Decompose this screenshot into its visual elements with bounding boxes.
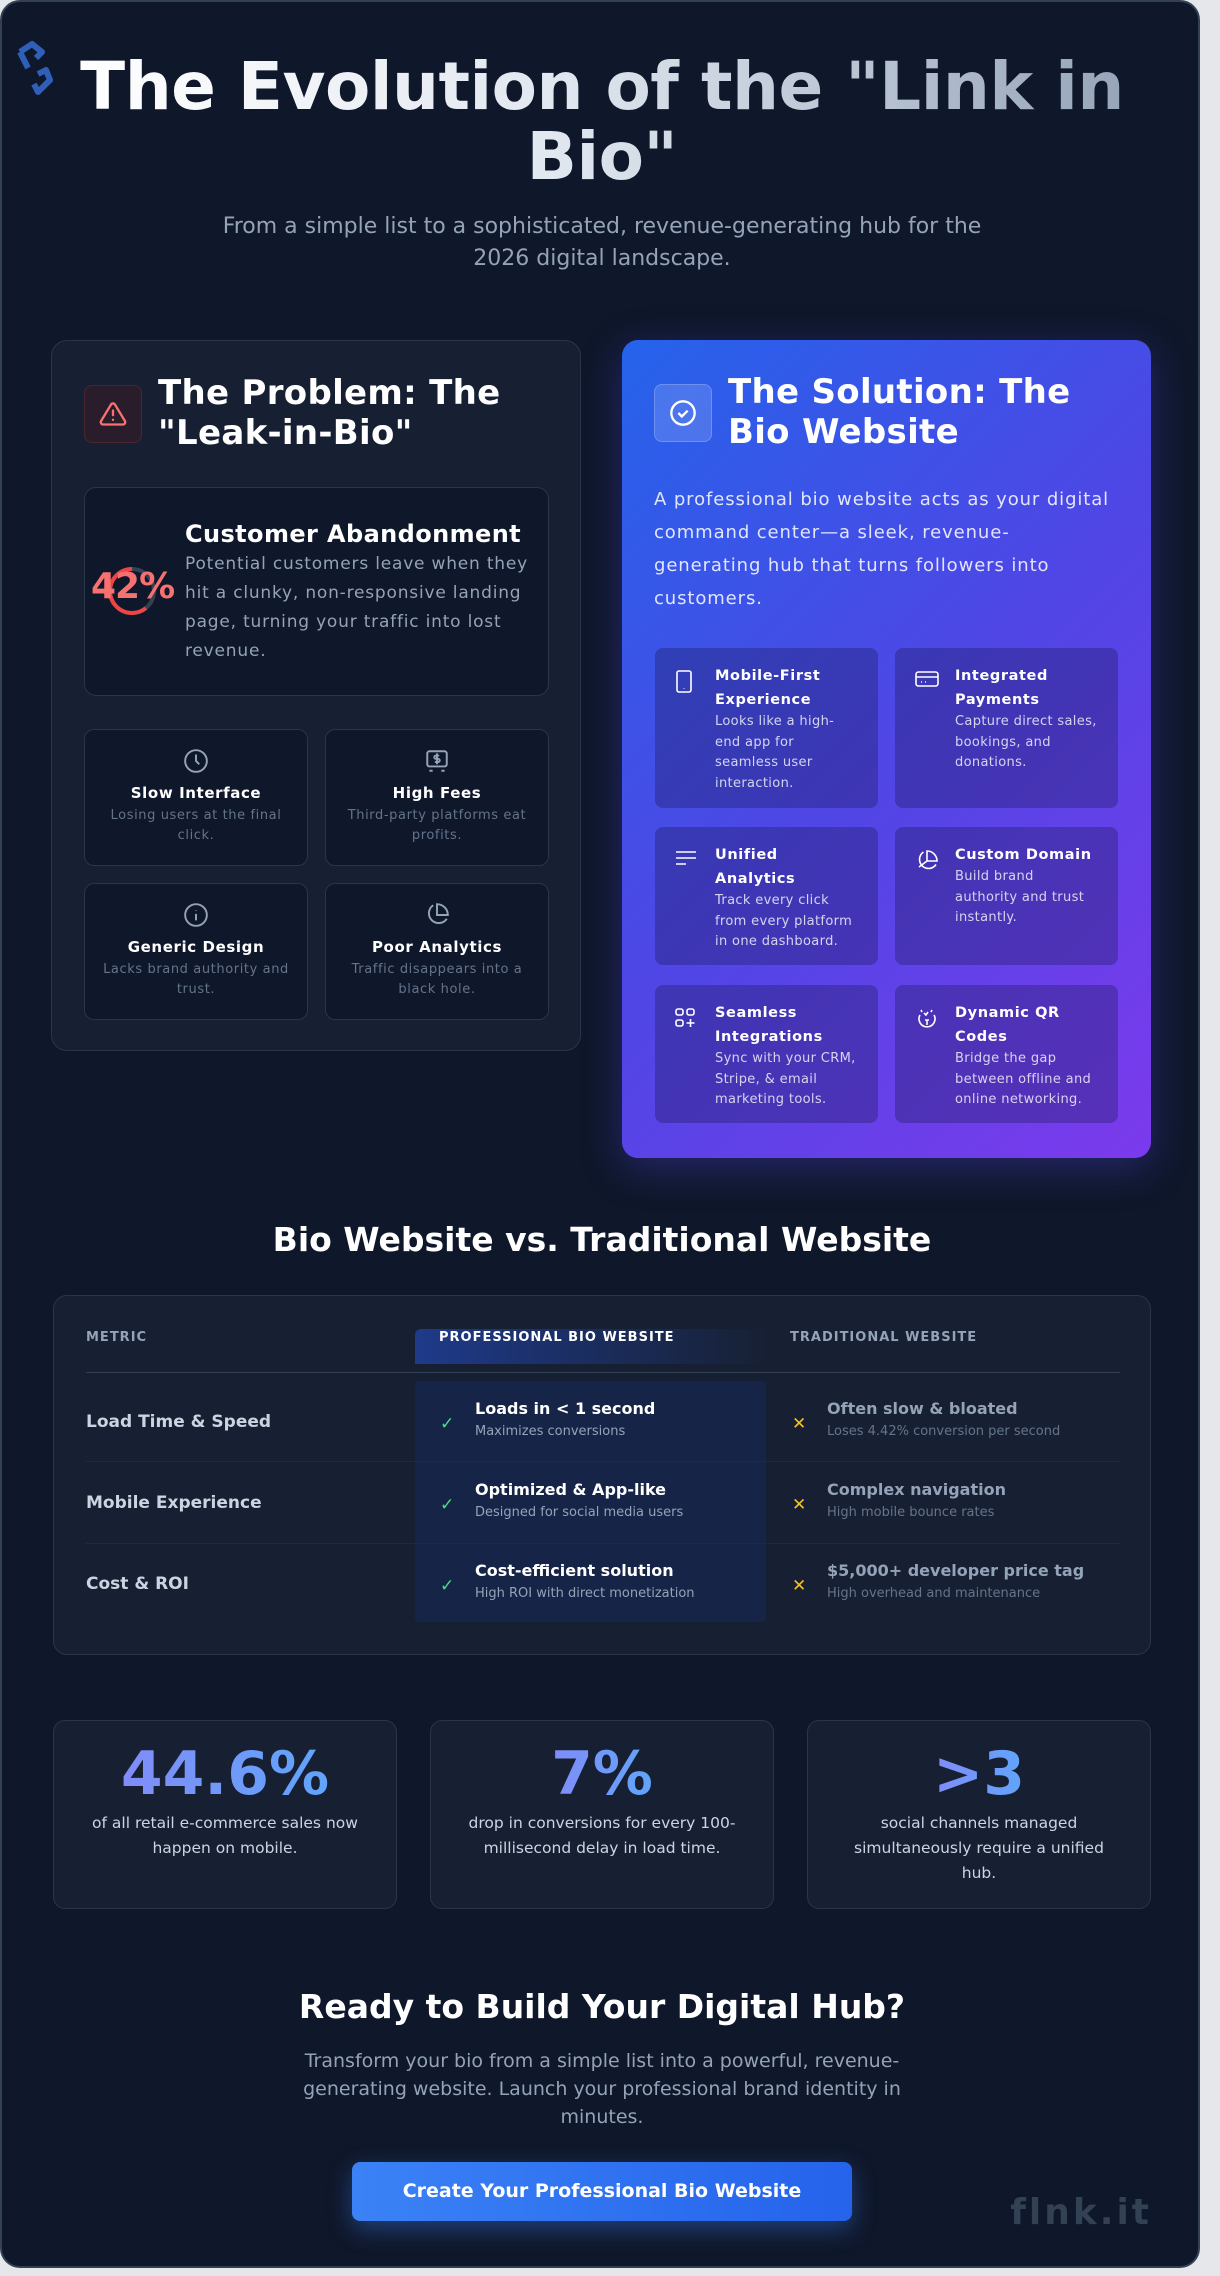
row: mobile experience: Mobile Experience: [86, 1493, 262, 1513]
row: load time: Load Time & Speed: [86, 1412, 271, 1432]
card: generic design: Lacks brand authority and trust.: [103, 962, 289, 997]
header labels: PROFESSIONAL BIO WEBSITE: [439, 1330, 675, 1345]
header labels: [86, 1330, 977, 1345]
card: high fees: Third-party platforms eat profits.: [348, 808, 526, 843]
card: high fees: High Fees: [393, 784, 481, 802]
feature: custom domain: Build brand: [955, 869, 1034, 884]
row: cost: ✓: [440, 1576, 454, 1596]
text: solution intro: [654, 489, 1109, 609]
card: slow interface: [84, 729, 308, 866]
cta text: Transform your bio from a simple list into a powerful, revenue-generating website. Launch your professional brand identity in minutes.: [303, 2050, 901, 2128]
card: poor analytics: [325, 883, 549, 1020]
feature: unified analytics: in one dashboard.: [715, 934, 838, 949]
row: mobile experience: ✓: [440, 1495, 454, 1515]
feature: custom domain: [895, 827, 1118, 965]
card: generic design: Generic Design: [128, 938, 264, 956]
feature: integrated payments: Integrated Payments: [955, 668, 1048, 708]
stat: social channels: social channels managed simultaneously require a unified hub.: [854, 1814, 1104, 1882]
row: load time: ✓: [440, 1414, 454, 1434]
feature: dynamic qr: Dynamic QR Codes: [955, 1005, 1060, 1045]
row: cost: ✕: [792, 1576, 806, 1596]
panel: solution: [622, 340, 1151, 1158]
feature: custom domain: instantly.: [955, 910, 1017, 925]
feature: seamless integrations: Seamless Integrations: [715, 1005, 823, 1045]
row: cost: High ROI with direct monetization: [475, 1586, 695, 1601]
feature: mobile-first: seamless user: [715, 755, 813, 770]
card: poor analytics: Poor Analytics: [372, 938, 502, 956]
row: cost: [86, 1561, 1084, 1601]
feature: seamless integrations: marketing tools.: [715, 1092, 826, 1107]
row: cost: High overhead and maintenance: [827, 1586, 1040, 1601]
feature: dynamic qr: between offline and: [955, 1072, 1091, 1086]
stat: conversion drop: 7%: [551, 1739, 653, 1809]
row: mobile experience: Complex navigation: [827, 1480, 1006, 1499]
card: slow interface: Slow Interface: [131, 784, 261, 802]
stat: conversion drop: [430, 1720, 774, 1909]
header: pro column highlight: [415, 1329, 766, 1364]
card: generic design: [84, 883, 308, 1020]
row: mobile experience: Optimized & App-like: [475, 1480, 666, 1499]
heading: problem: The Problem: The "Leak-in-Bio": [158, 373, 501, 453]
row: load time: ✕: [792, 1414, 806, 1434]
row: load time: Loses 4.42% conversion per second: [827, 1424, 1060, 1439]
text: solution intro: generating hub that turns followers into: [654, 555, 1049, 576]
row: load time: Often slow & bloated: [827, 1399, 1018, 1418]
stat: mobile sales: of all retail e-commerce sales now happen on mobile.: [92, 1814, 358, 1857]
feature: unified analytics: Unified Analytics: [715, 847, 795, 887]
feature: dynamic qr: Bridge the gap: [955, 1051, 1056, 1066]
heading: comparison: Bio Website vs. Traditional Website: [273, 1220, 931, 1259]
feature: seamless integrations: [655, 985, 878, 1123]
subtitle: From a simple list to a sophisticated, revenue-generating hub for the 2026 digital landscape.: [223, 214, 981, 271]
stat: social channels: [807, 1720, 1151, 1909]
feature: custom domain: Custom Domain: [955, 847, 1092, 863]
text: solution intro: A professional bio website acts as your digital: [654, 489, 1109, 510]
stat: social channels: >3: [933, 1739, 1025, 1809]
stat: mobile sales: [53, 1720, 397, 1909]
cta button: Create Your Professional Bio Website: [403, 2180, 801, 2202]
text: solution intro: command center—a sleek, revenue-: [654, 522, 1010, 543]
text: solution intro: customers.: [654, 588, 763, 609]
feature: seamless integrations: Stripe, & email: [715, 1072, 817, 1086]
title: The Evolution of the "Link in Bio": [80, 48, 1124, 195]
feature: mobile-first: interaction.: [715, 776, 794, 790]
card: poor analytics: Traffic disappears into a black hole.: [352, 962, 522, 997]
feature: unified analytics: Track every click: [715, 893, 829, 908]
comparison table: [53, 1295, 1151, 1655]
row: load time: [86, 1399, 1060, 1439]
row: cost: $5,000+ developer price tag: [827, 1561, 1084, 1580]
row: mobile experience: ✕: [792, 1495, 806, 1515]
feature: mobile-first: [655, 648, 878, 808]
feature: mobile-first: end app for: [715, 734, 794, 750]
feature: integrated payments: [895, 648, 1118, 808]
text: abandonment: Customer Abandonment: [185, 520, 521, 548]
panel: problem: [51, 340, 581, 1051]
feature: unified analytics: [655, 827, 878, 965]
donut chart 42%: 42%: [91, 566, 174, 607]
row: mobile experience: High mobile bounce rates: [827, 1505, 994, 1520]
feature: integrated payments: bookings, and: [955, 734, 1051, 750]
feature: seamless integrations: Sync with your CRM,: [715, 1051, 856, 1066]
feature: mobile-first: Mobile-First Experience: [715, 668, 820, 708]
stat card: customer abandonment: [84, 487, 549, 696]
feature: integrated payments: Capture direct sales,: [955, 714, 1097, 729]
stat: conversion drop: drop in conversions for every 100-millisecond delay in load time.: [469, 1814, 735, 1857]
pro column background: [415, 1381, 766, 1622]
row: mobile experience: Designed for social media users: [475, 1505, 683, 1520]
feature: mobile-first: Looks like a high-: [715, 714, 834, 729]
stat: mobile sales: 44.6%: [121, 1739, 329, 1809]
heading: solution: The Solution: The Bio Website: [728, 372, 1070, 452]
card: slow interface: Losing users at the final click.: [111, 808, 281, 843]
feature: unified analytics: from every platform: [715, 914, 852, 928]
row: mobile experience: [86, 1480, 1006, 1520]
cta button: [352, 2162, 852, 2221]
row: cost: Cost & ROI: [86, 1574, 189, 1594]
brand: flnk.it: flnk.it: [1010, 2192, 1152, 2233]
cta heading: Ready to Build Your Digital Hub?: [299, 1987, 905, 2026]
header labels: METRIC: [86, 1330, 147, 1345]
header labels: TRADITIONAL WEBSITE: [790, 1330, 977, 1345]
feature: dynamic qr: [895, 985, 1118, 1123]
text: abandonment: Potential customers leave when they hit a clunky, non-responsive landing page, turning your traffic into lost revenue.: [185, 554, 528, 661]
row: cost: Cost-efficient solution: [475, 1561, 674, 1580]
row: load time: Maximizes conversions: [475, 1424, 625, 1439]
icon: warning: [84, 385, 142, 443]
card: high fees: [325, 729, 549, 866]
feature: custom domain: authority and trust: [955, 890, 1084, 904]
feature: dynamic qr: online networking.: [955, 1092, 1082, 1107]
logo icon: [17, 40, 53, 95]
feature: integrated payments: donations.: [955, 755, 1027, 770]
row: load time: Loads in < 1 second: [475, 1399, 655, 1418]
icon: check circle: [654, 384, 712, 442]
